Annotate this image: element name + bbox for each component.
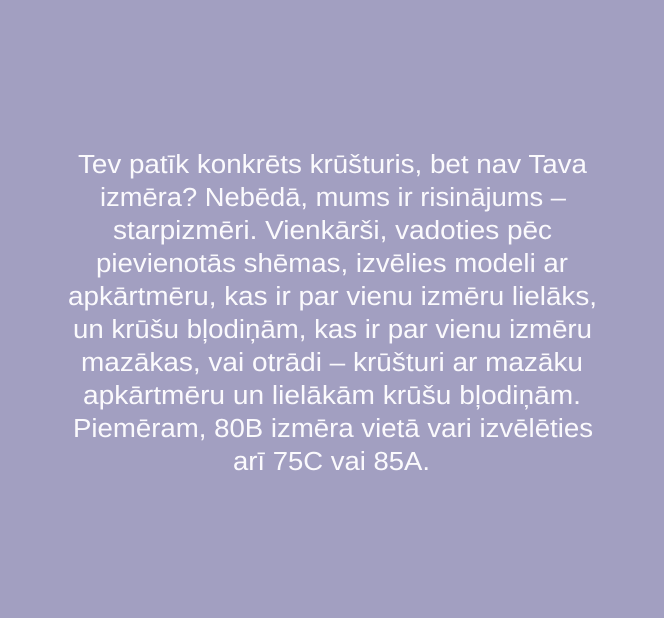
text block: explanation of in-between sizes: pievienotās shēmas, izvēlies modeli ar	[96, 250, 569, 278]
text block: explanation of in-between sizes	[68, 151, 597, 476]
text block: explanation of in-between sizes: apkārtmēru, kas ir par vienu izmēru lielāks,	[68, 283, 597, 311]
text block: explanation of in-between sizes: Piemēram, 80B izmēra vietā vari izvēlēties	[73, 415, 593, 443]
text block: explanation of in-between sizes: apkārtmēru un lielākām krūšu bļodiņām.	[83, 382, 581, 410]
text block: explanation of in-between sizes: mazākas, vai otrādi – krūšturi ar mazāku	[81, 349, 583, 377]
text block: explanation of in-between sizes: izmēra? Nebēdā, mums ir risinājums –	[100, 184, 567, 212]
text block: explanation of in-between sizes: starpizmēri. Vienkārši, vadoties pēc	[113, 217, 552, 245]
text block: explanation of in-between sizes: un krūšu bļodiņām, kas ir par vienu izmēru	[73, 316, 592, 344]
text block: explanation of in-between sizes: arī 75C vai 85A.	[233, 448, 430, 476]
text block: explanation of in-between sizes: Tev patīk konkrēts krūšturis, bet nav Tava	[78, 151, 588, 179]
